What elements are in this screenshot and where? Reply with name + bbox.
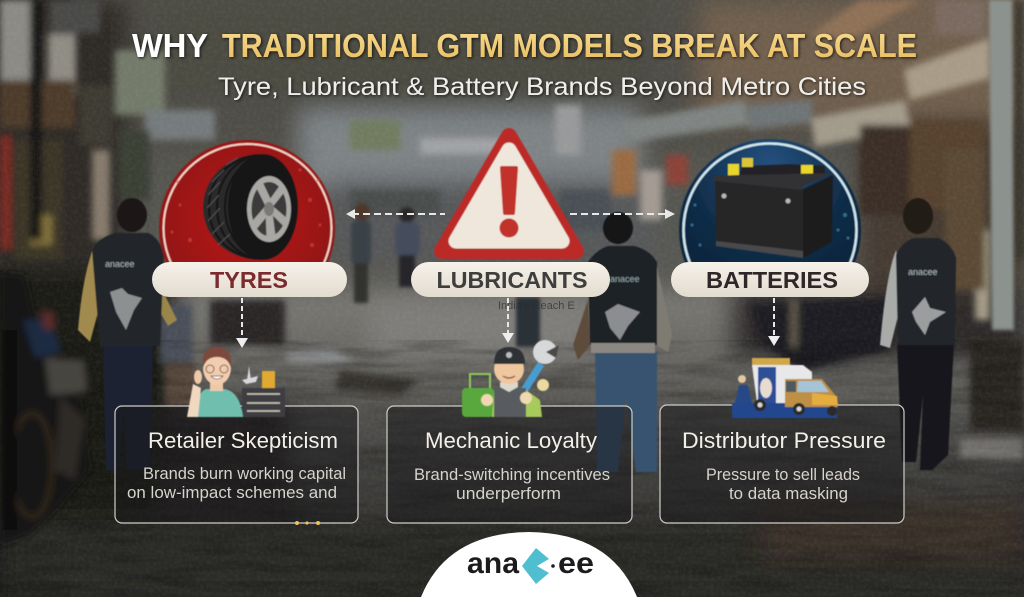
arrow: tyres down: [236, 298, 248, 348]
card: mechanic loyalty: Brand-switching incentives: [414, 465, 610, 484]
logo badge: [421, 532, 637, 597]
ground details: [283, 350, 355, 362]
logo badge: ee: [558, 547, 594, 580]
card: mechanic loyalty: underperform: [456, 484, 561, 503]
pill: lubricants: [411, 262, 610, 297]
icon: retailer: [187, 347, 285, 417]
crowd figures: [351, 203, 540, 347]
subtitle: Tyre, Lubricant & Battery Brands Beyond Metro Cities: [218, 73, 866, 101]
pill: batteries: BATTERIES: [706, 267, 838, 293]
arrow: batteries down: [768, 298, 780, 346]
icon: delivery truck: [732, 358, 838, 418]
shop fronts right: [904, 38, 990, 100]
faint caption: India's Reach E: [498, 300, 575, 312]
card: retailer skepticism: Retailer Skepticism: [148, 428, 338, 453]
pill: batteries: [671, 262, 869, 297]
card: mechanic loyalty: [387, 406, 632, 523]
card: retailer skepticism: Brands burn working capital: [143, 464, 346, 483]
parked motorbike left: [0, 272, 90, 545]
worker right: anacee: [908, 267, 938, 277]
card: distributor pressure: to data masking: [729, 484, 848, 503]
icon: tyre in red circle: [158, 140, 336, 262]
card: mechanic loyalty: Mechanic Loyalty: [425, 428, 597, 453]
card: distributor pressure: Distributor Pressure: [682, 428, 886, 453]
worker left: anacee: [105, 259, 135, 269]
arrow: lubricants down: [502, 298, 514, 343]
pill: lubricants: LUBRICANTS: [436, 267, 588, 293]
pill: tyres: [152, 262, 347, 297]
crowd and shops centre: [420, 138, 510, 154]
worker centre: [573, 212, 672, 472]
pole right: [989, 0, 1014, 330]
worker right: [880, 198, 956, 470]
card: distributor pressure: [660, 405, 904, 523]
ground texture: [0, 340, 1024, 597]
worker left: [78, 198, 177, 470]
logo badge: ana: [467, 547, 519, 580]
title: WHY: [132, 27, 208, 64]
connector: warning to tyres: [346, 209, 445, 219]
icon: battery in blue circle: [678, 138, 862, 262]
card: retailer skepticism: on low-impact schemes and: [127, 483, 337, 502]
pill: tyres: TYRES: [210, 267, 288, 293]
connector: warning to batteries: [570, 209, 675, 219]
title: TRADITIONAL GTM MODELS BREAK AT SCALE: [222, 27, 917, 64]
card: retailer skepticism: [115, 406, 358, 525]
worker centre: anacee: [610, 274, 640, 284]
card: distributor pressure: Pressure to sell leads: [706, 465, 860, 484]
icon: mechanic: [462, 340, 559, 417]
icon: warning triangle: [442, 136, 576, 251]
